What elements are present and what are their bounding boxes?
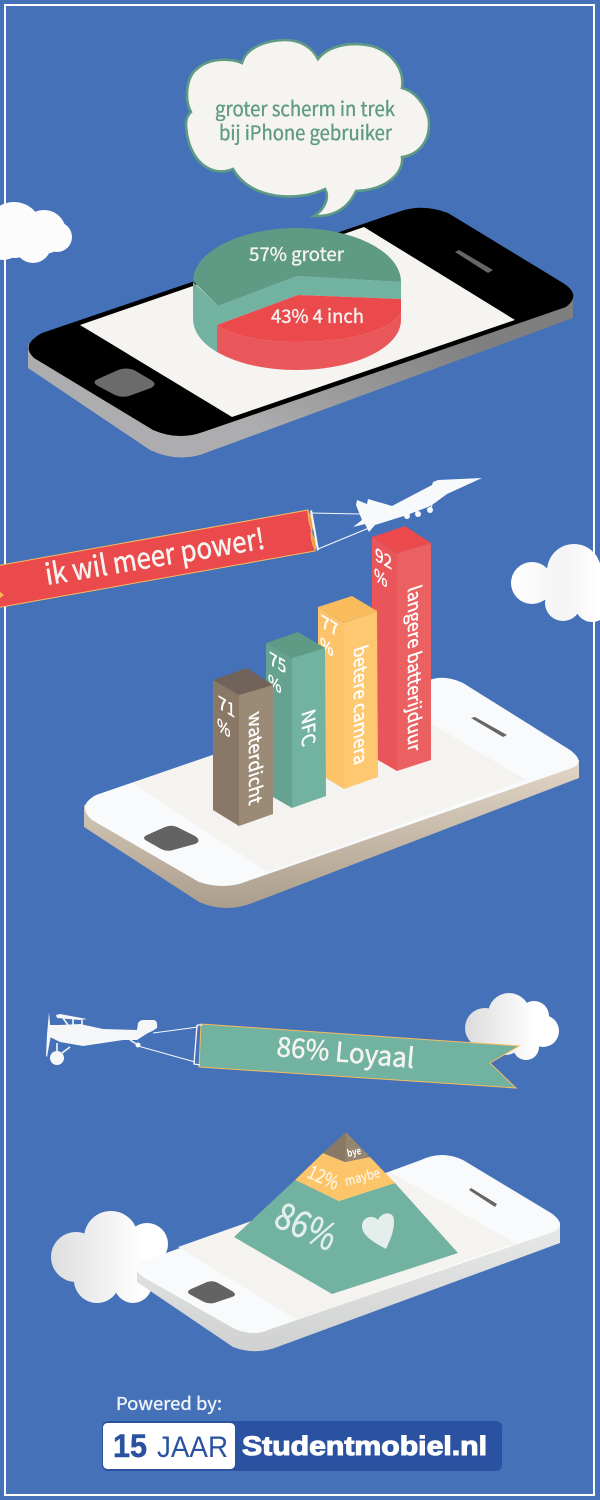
- phone side: [137, 1223, 560, 1351]
- tow ropes: [138, 1027, 198, 1062]
- speech bubble: [186, 40, 429, 216]
- pyramid: 12% level: [295, 1153, 395, 1201]
- pie chart: [193, 228, 401, 370]
- banner pole: [194, 1025, 202, 1065]
- pie label 57%: 57% groter: [249, 240, 345, 267]
- phone face: [85, 678, 579, 886]
- bar: betere camera: %: [320, 629, 333, 662]
- bar: waterdicht: 71: [218, 688, 235, 724]
- bar: langere batterijduur: 92: [375, 540, 392, 576]
- banner text: 86% Loyaal: [275, 1025, 416, 1076]
- green slice top: [193, 228, 401, 306]
- bar: betere camera: betere camera: [348, 642, 373, 768]
- red slice side: [217, 312, 401, 370]
- home button: [188, 1281, 235, 1303]
- powered by label: Powered by:: [116, 1390, 222, 1416]
- bar: NFC: [266, 632, 326, 808]
- phone: white with beige edge: [84, 678, 579, 908]
- banner pole: [308, 510, 319, 551]
- label bye: bye: [345, 1142, 362, 1160]
- home button: [144, 826, 198, 851]
- bar: langere batterijduur: langere batterijduur: [402, 582, 427, 756]
- phone: white with grey edge: [136, 1155, 560, 1351]
- banner: 86% Loyaal: [138, 1024, 519, 1088]
- pyramid: bye level: [323, 1132, 370, 1162]
- cloud: middle right: [511, 544, 600, 622]
- banner notch: [0, 592, 4, 598]
- home button: [94, 368, 154, 397]
- cloud: lower right: [465, 993, 559, 1060]
- bar: NFC: %: [268, 666, 281, 699]
- logo: Studentmobiel.nl: Studentmobiel.nl: [242, 1431, 487, 1461]
- bar: waterdicht: %: [217, 710, 230, 743]
- bar chart: [213, 526, 431, 826]
- bar: NFC: 75: [269, 644, 286, 680]
- bar: waterdicht: waterdicht: [243, 708, 268, 808]
- icon: biplane: [46, 1012, 157, 1065]
- icon: jet plane: [353, 478, 482, 532]
- phone screen: [132, 696, 526, 872]
- green slice side: [193, 276, 401, 352]
- bar: betere camera: [318, 596, 378, 789]
- speech bubble text: [215, 93, 395, 146]
- phone screen: [80, 227, 515, 417]
- banner: ik wil meer power: [0, 510, 369, 609]
- bar: langere batterijduur: %: [374, 560, 387, 593]
- phone side: [84, 760, 579, 908]
- label maybe: maybe: [342, 1162, 382, 1190]
- phone face: [29, 208, 573, 436]
- speaker: [455, 250, 493, 273]
- bar: langere batterijduur: [372, 526, 431, 771]
- red slice top: [217, 295, 401, 342]
- bar: waterdicht: [213, 668, 273, 826]
- banner text: ik wil meer power!: [42, 516, 267, 594]
- logo: Studentmobiel.nl: 15: [113, 1428, 147, 1464]
- cloud: top left: [0, 202, 72, 263]
- phone face: [136, 1155, 560, 1333]
- phone: black: [28, 208, 573, 458]
- logo: Studentmobiel.nl: JAAR: [157, 1431, 228, 1464]
- cloud: lower left: [51, 1211, 168, 1303]
- tow ropes: [312, 513, 369, 549]
- speech bubble text: groter scherm in trek: [215, 93, 395, 122]
- pyramid: 86% level: [234, 1180, 458, 1294]
- phone screen: [178, 1172, 515, 1320]
- speaker: [469, 1188, 497, 1207]
- icon: heart: [362, 1213, 394, 1249]
- label 86%: 86%: [267, 1186, 347, 1262]
- bar: NFC: NFC: [296, 706, 321, 750]
- pyramid chart: [234, 1132, 458, 1294]
- logo: Studentmobiel.nl: [102, 1421, 502, 1471]
- speech bubble text: bij iPhone gebruiker: [219, 117, 392, 146]
- pie label 43%: 43% 4 inch: [271, 302, 364, 329]
- phone side: [28, 295, 573, 458]
- speaker: [471, 717, 507, 737]
- label 12%: 12%: [304, 1158, 344, 1195]
- bar: betere camera: 77: [321, 607, 338, 643]
